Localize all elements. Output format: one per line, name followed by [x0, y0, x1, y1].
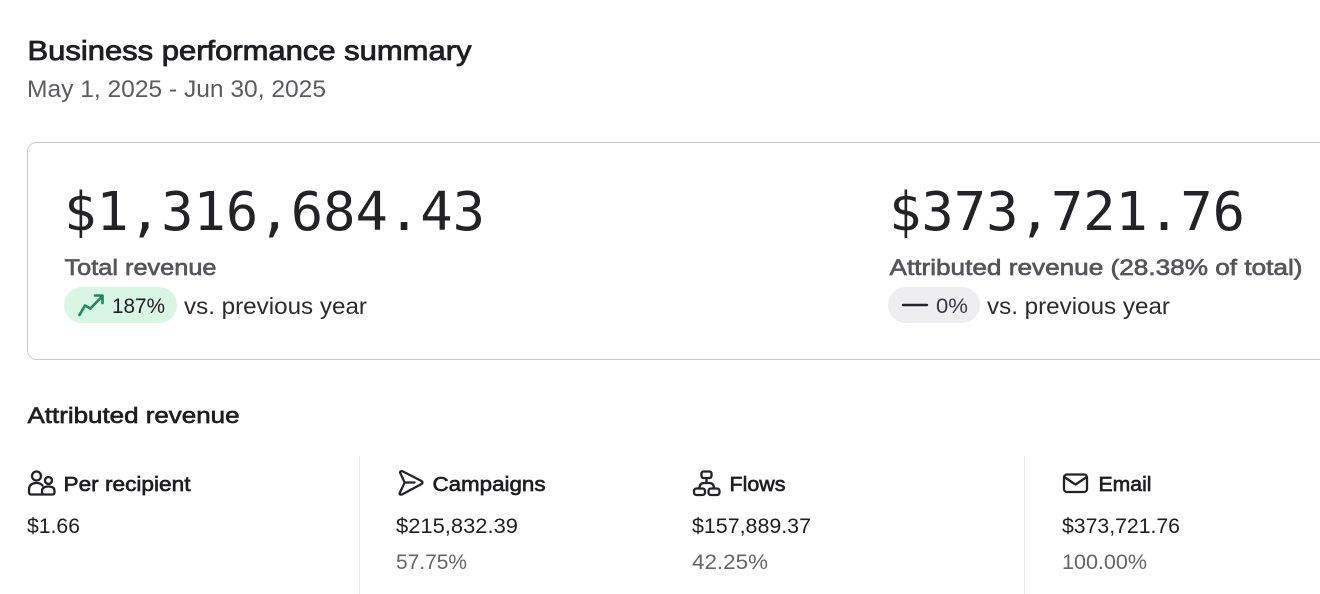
- metric: campaigns: $215,832.39: [396, 515, 518, 538]
- metric: email: $373,721.76: [1062, 515, 1180, 538]
- metric: email: 100.00%: [1062, 551, 1147, 574]
- attributed revenue label: Attributed revenue (28.38% of total): [890, 255, 1302, 280]
- attributed revenue comparison: vs. previous year: [987, 293, 1170, 319]
- metric: per recipient: $1.66: [27, 515, 80, 538]
- total revenue comparison: vs. previous year: [184, 293, 367, 319]
- badge: 187% up: [64, 287, 177, 323]
- metric: email: Email: [1098, 473, 1152, 496]
- icon: flow tree: [694, 472, 720, 495]
- metric: per recipient: [27, 472, 191, 538]
- panel: revenue summary: [28, 142, 1320, 360]
- section heading: Attributed revenue: [28, 403, 240, 428]
- icon: send arrow: [400, 471, 422, 495]
- icon: people: [29, 472, 54, 494]
- icon: flat dash: [903, 304, 927, 306]
- total revenue label: Total revenue: [64, 255, 216, 280]
- date range: May 1, 2025 - Jun 30, 2025: [27, 76, 326, 103]
- metric: flows: $157,889.37: [692, 515, 811, 538]
- total revenue value: $1,316,684.43: [64, 180, 485, 243]
- metric: flows: 42.25%: [692, 551, 768, 574]
- metric: email: [1062, 473, 1180, 574]
- attributed revenue value: $373,721.76: [889, 180, 1245, 243]
- badge: 0% flat: [888, 287, 980, 323]
- icon: trending up arrow: [80, 296, 102, 315]
- metric: campaigns: Campaigns: [432, 473, 546, 496]
- metric: per recipient: Per recipient: [64, 473, 191, 496]
- metric: campaigns: [396, 471, 546, 574]
- icon: envelope: [1064, 474, 1087, 492]
- badge: 0% flat: 0%: [936, 295, 968, 318]
- badge: 187% up: 187%: [112, 295, 165, 318]
- metric: flows: Flows: [730, 473, 786, 496]
- metric: campaigns: 57.75%: [396, 551, 467, 574]
- metric: flows: [692, 472, 811, 574]
- title: Business performance summary: [28, 35, 472, 66]
